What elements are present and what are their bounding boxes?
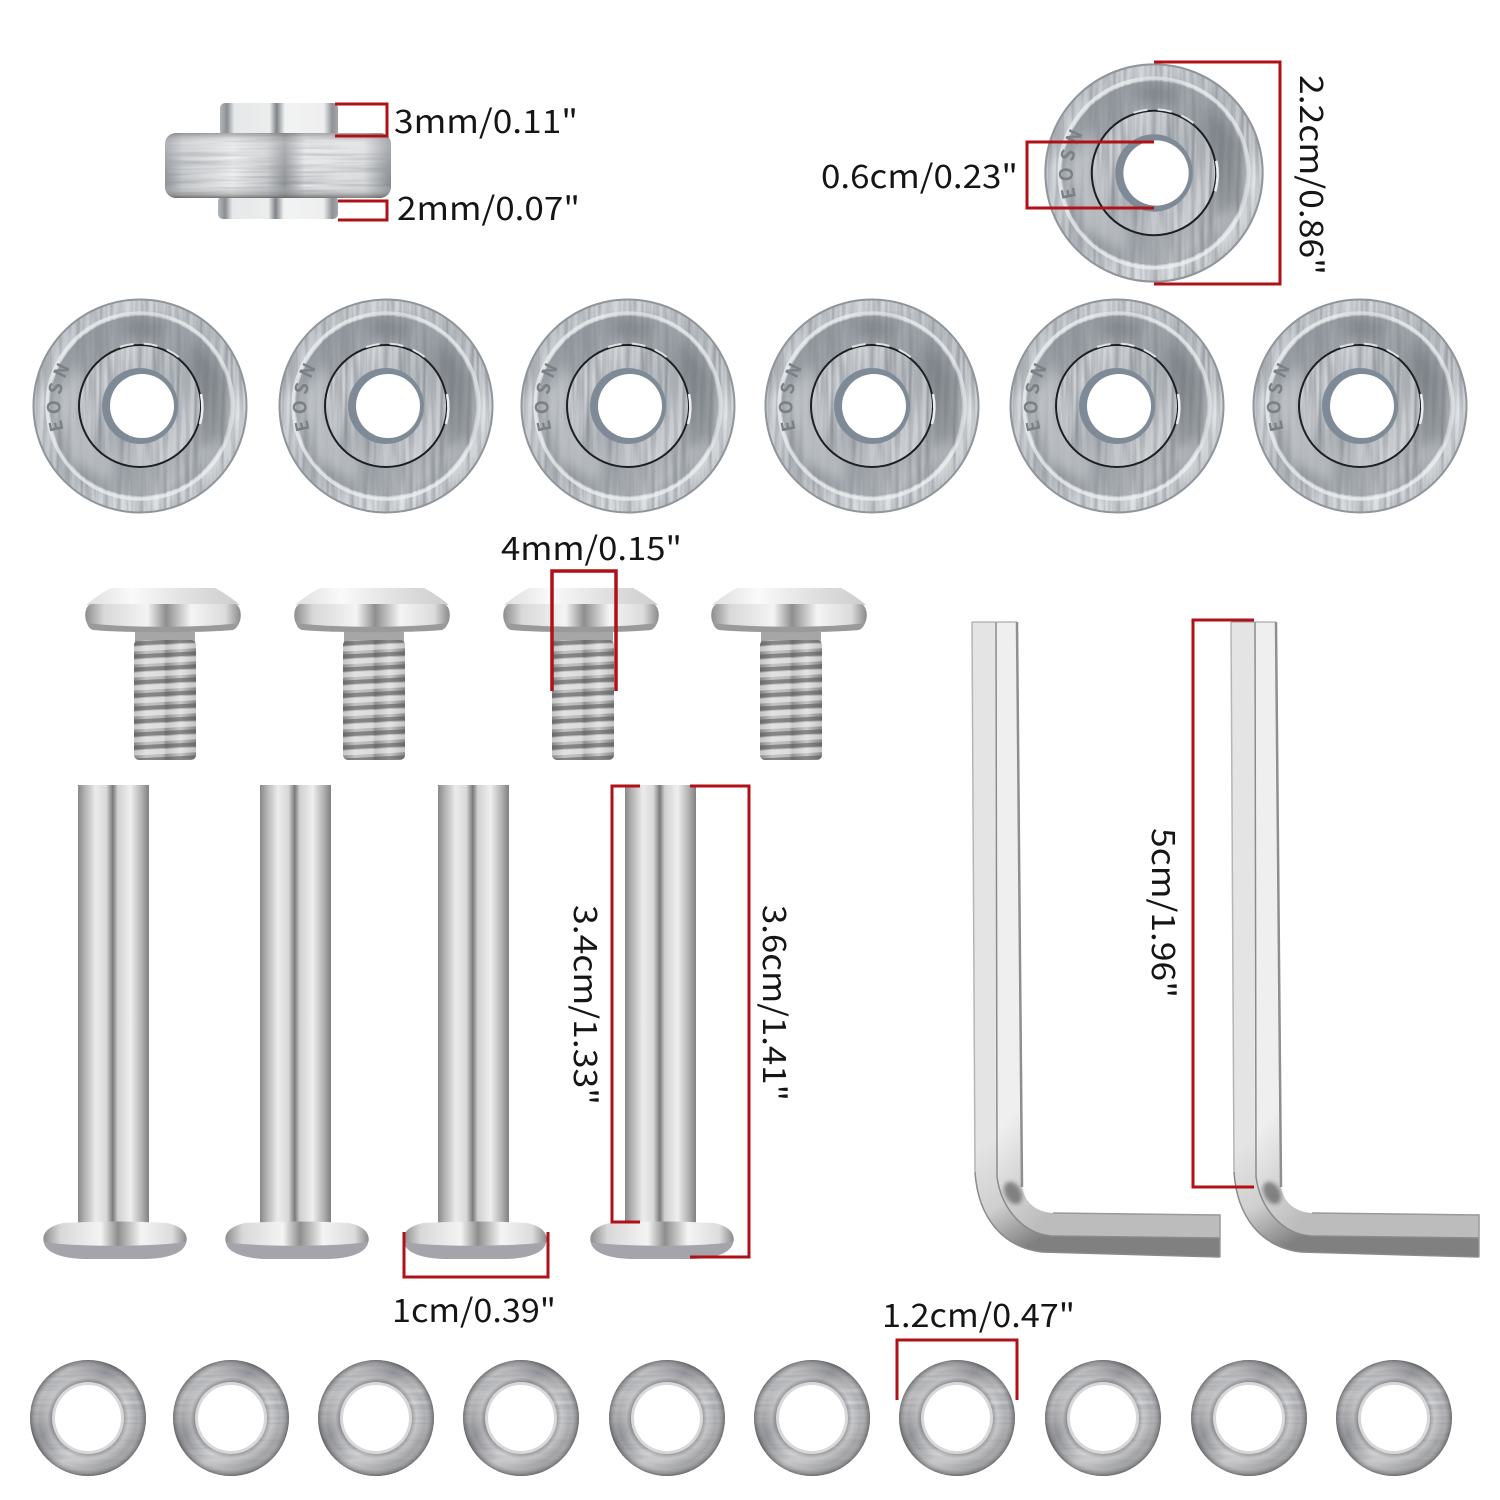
label: 3.6cm/1.41: 3.6cm/1.41" — [753, 905, 799, 1101]
upper hub — [220, 103, 338, 139]
label: 2.2cm/0.86: 2.2cm/0.86" — [1290, 75, 1336, 275]
side-view bearing — [165, 103, 391, 219]
dimension: 2.2cm bracket — [1154, 62, 1280, 284]
dimension: 5cm bracket — [1193, 620, 1254, 1187]
race shading — [165, 133, 391, 198]
dimension: 4mm bracket — [552, 571, 616, 691]
label: 3.4cm/1.33: 3.4cm/1.33" — [564, 905, 610, 1105]
dimension: 0.6cm bracket — [1027, 142, 1154, 208]
row of ten washers — [30, 1360, 1452, 1476]
dimension: 1cm bracket — [404, 1232, 548, 1277]
row of four short screws — [85, 588, 867, 760]
lower hub — [218, 196, 338, 219]
label: 5cm/1.96: 5cm/1.96" — [1142, 828, 1188, 998]
dimension: 2mm bracket — [338, 201, 387, 220]
dimension: 3.4cm bracket — [612, 786, 640, 1222]
label: 3mm/0.11: 3mm/0.11" — [394, 97, 578, 143]
label: 1.2cm/0.47: 1.2cm/0.47" — [882, 1291, 1075, 1337]
outer race — [165, 133, 391, 198]
front-view bearing — [1045, 64, 1263, 282]
label: 2mm/0.07: 2mm/0.07" — [397, 184, 580, 230]
row of four long bolts — [43, 785, 734, 1259]
label: 4mm/0.15: 4mm/0.15" — [501, 524, 682, 570]
row of six bearings — [33, 299, 1467, 513]
dimension: 3.6cm bracket — [690, 786, 749, 1257]
label: 1cm/0.39: 1cm/0.39" — [392, 1286, 556, 1332]
dimension: 3mm bracket — [335, 104, 387, 136]
dimension: 1.2cm bracket — [897, 1340, 1017, 1400]
label: 0.6cm/0.23: 0.6cm/0.23" — [821, 152, 1018, 198]
hex keys — [972, 622, 1479, 1257]
